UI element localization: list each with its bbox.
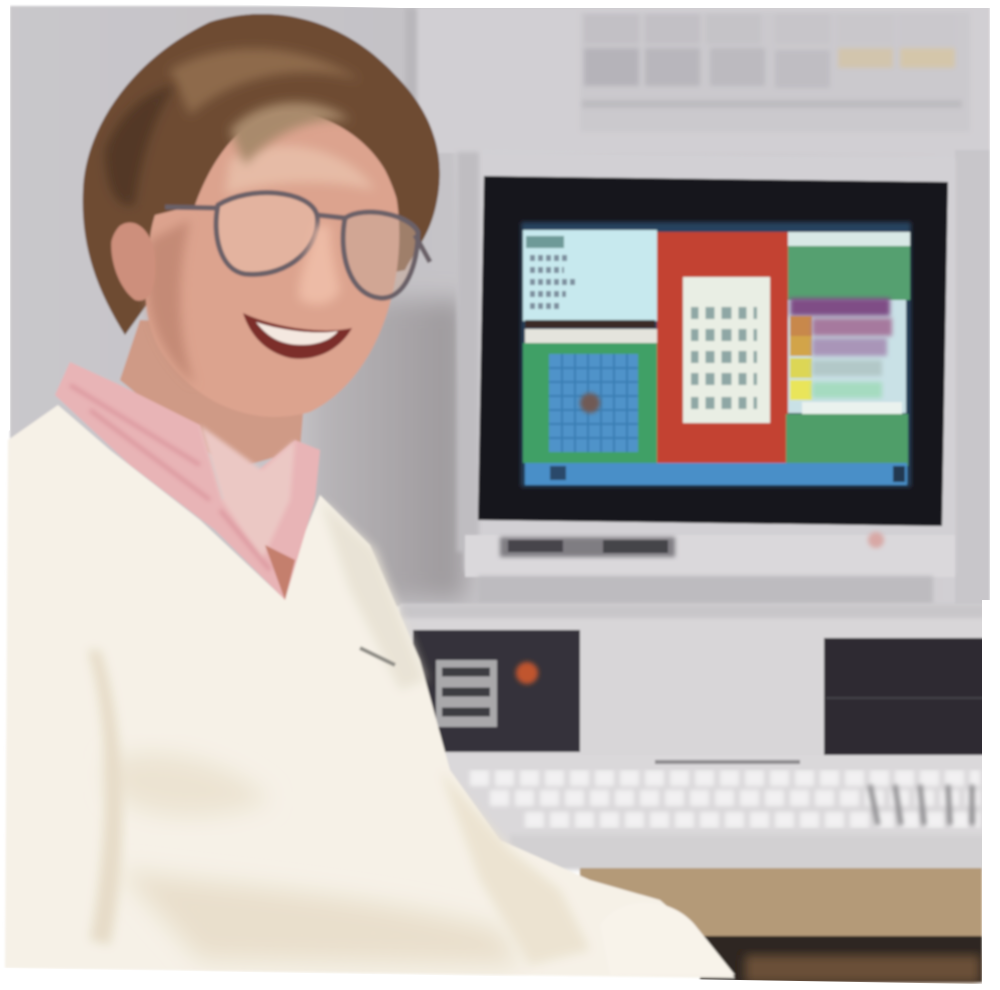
nose <box>299 225 340 305</box>
background wall <box>10 6 990 610</box>
screen desktop <box>521 222 911 487</box>
computer base unit <box>400 604 985 769</box>
keyboard <box>445 755 985 870</box>
light blue window <box>523 230 657 321</box>
left drive bay <box>413 630 580 752</box>
calculator <box>683 277 770 423</box>
colour palette <box>788 298 906 414</box>
back of hair <box>83 14 440 335</box>
red window <box>657 232 788 465</box>
monitor <box>455 150 955 604</box>
neck <box>120 320 310 470</box>
blue taskbar <box>525 463 907 485</box>
monitor casing <box>455 150 955 575</box>
monitor base <box>478 576 933 604</box>
green panel bottom right <box>786 414 908 466</box>
power light <box>868 532 884 548</box>
shirt collar <box>55 362 320 600</box>
man <box>5 14 735 978</box>
monitor control strip <box>500 537 675 557</box>
green window <box>523 343 657 463</box>
hair fringe <box>85 14 440 262</box>
wooden desk <box>580 868 982 983</box>
ear <box>111 223 156 301</box>
upper equipment panel with keys <box>580 12 970 132</box>
right drive bay <box>824 638 985 760</box>
glasses <box>165 193 430 298</box>
blue tile grid <box>549 354 638 452</box>
dark screen bezel <box>478 176 948 526</box>
green panel top right <box>788 232 910 246</box>
smile <box>243 313 352 359</box>
face <box>146 108 399 417</box>
sweater <box>5 405 735 978</box>
